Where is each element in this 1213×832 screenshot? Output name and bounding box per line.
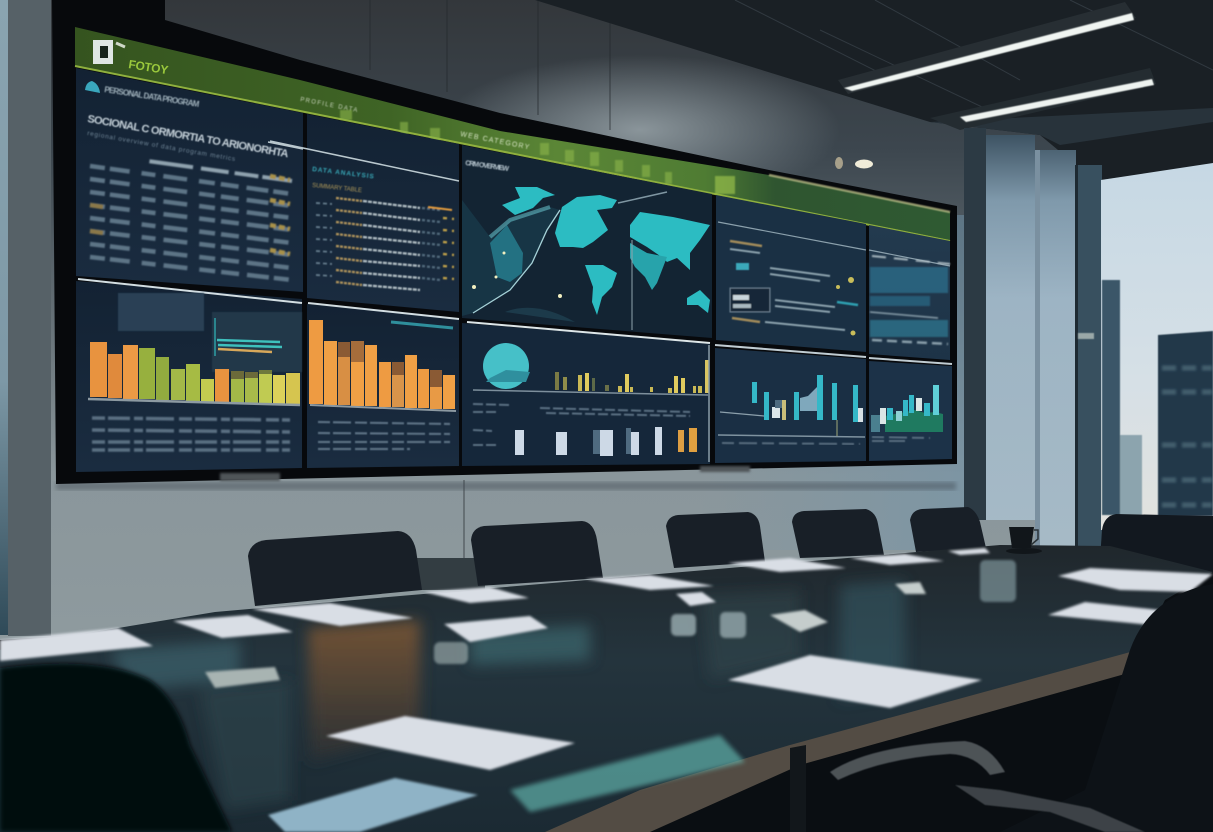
chair 5 xyxy=(910,507,986,552)
chair 4 xyxy=(792,509,884,558)
panel: bottom middle bar chart xyxy=(307,303,459,468)
wall screen frame xyxy=(52,0,957,490)
foreground right chair xyxy=(790,584,1213,832)
map continents xyxy=(502,187,710,315)
table reflections xyxy=(110,580,905,810)
bench behind chairs xyxy=(415,558,485,590)
green header band: PROFILE DATA xyxy=(300,97,358,114)
panel: top left table: SOCIONAL C ORMORTIA TO ARIONORHTA xyxy=(86,113,290,160)
panel: bottom centre charts xyxy=(462,322,710,466)
panel e blocks xyxy=(870,256,950,344)
green header band: WEB CATEGORY xyxy=(460,131,530,151)
panel: top left table: PERSONAL DATA PROGRAM xyxy=(104,85,200,109)
foreground left chair xyxy=(0,664,232,832)
left column xyxy=(0,0,51,636)
small bars xyxy=(555,360,709,393)
icon: teal pie xyxy=(483,343,530,389)
wall spotlight xyxy=(835,157,873,169)
coffee cup xyxy=(1006,527,1042,554)
panel: top left table xyxy=(76,68,303,292)
panel: top right charts xyxy=(716,195,950,360)
logo xyxy=(93,40,169,77)
conference table xyxy=(0,545,1213,832)
panel: bottom right charts xyxy=(715,345,952,463)
dense text rows xyxy=(316,198,454,290)
data table rows xyxy=(90,153,292,280)
translucent globe arc xyxy=(462,200,575,322)
chair 6 xyxy=(1100,514,1213,572)
panel: top middle table: DATA ANALYSIS xyxy=(312,166,375,181)
teal bars xyxy=(752,375,863,422)
lower bars xyxy=(515,427,697,456)
right wall pillar and window xyxy=(964,128,1213,546)
icon: cloud xyxy=(85,81,100,93)
panel: world map: CRM OVERVIEW xyxy=(465,160,510,173)
chairs along far side xyxy=(248,507,1213,606)
glasses and cups xyxy=(434,527,1042,664)
panel d text blocks xyxy=(730,241,858,330)
logo: FOTOY xyxy=(128,57,169,77)
stacked green bars xyxy=(871,385,943,432)
bars xyxy=(309,320,455,409)
panel: bottom left bar chart xyxy=(76,279,302,472)
panel: top middle table: SUMMARY TABLE xyxy=(312,183,362,194)
chair 2 xyxy=(471,521,603,586)
panel: top left table: regional overview of data program metrics xyxy=(87,130,236,163)
bars xyxy=(90,342,300,404)
under-table shadow xyxy=(0,560,1213,832)
panel: world map xyxy=(462,145,712,338)
panel: top middle table xyxy=(270,114,459,312)
green header band xyxy=(75,27,950,241)
table front edge xyxy=(545,648,1145,832)
buildings outside xyxy=(1102,280,1213,516)
chair 3 xyxy=(666,512,765,568)
papers on table xyxy=(0,548,1213,832)
chair 1 xyxy=(248,531,422,606)
ceiling and lights xyxy=(535,0,1213,180)
